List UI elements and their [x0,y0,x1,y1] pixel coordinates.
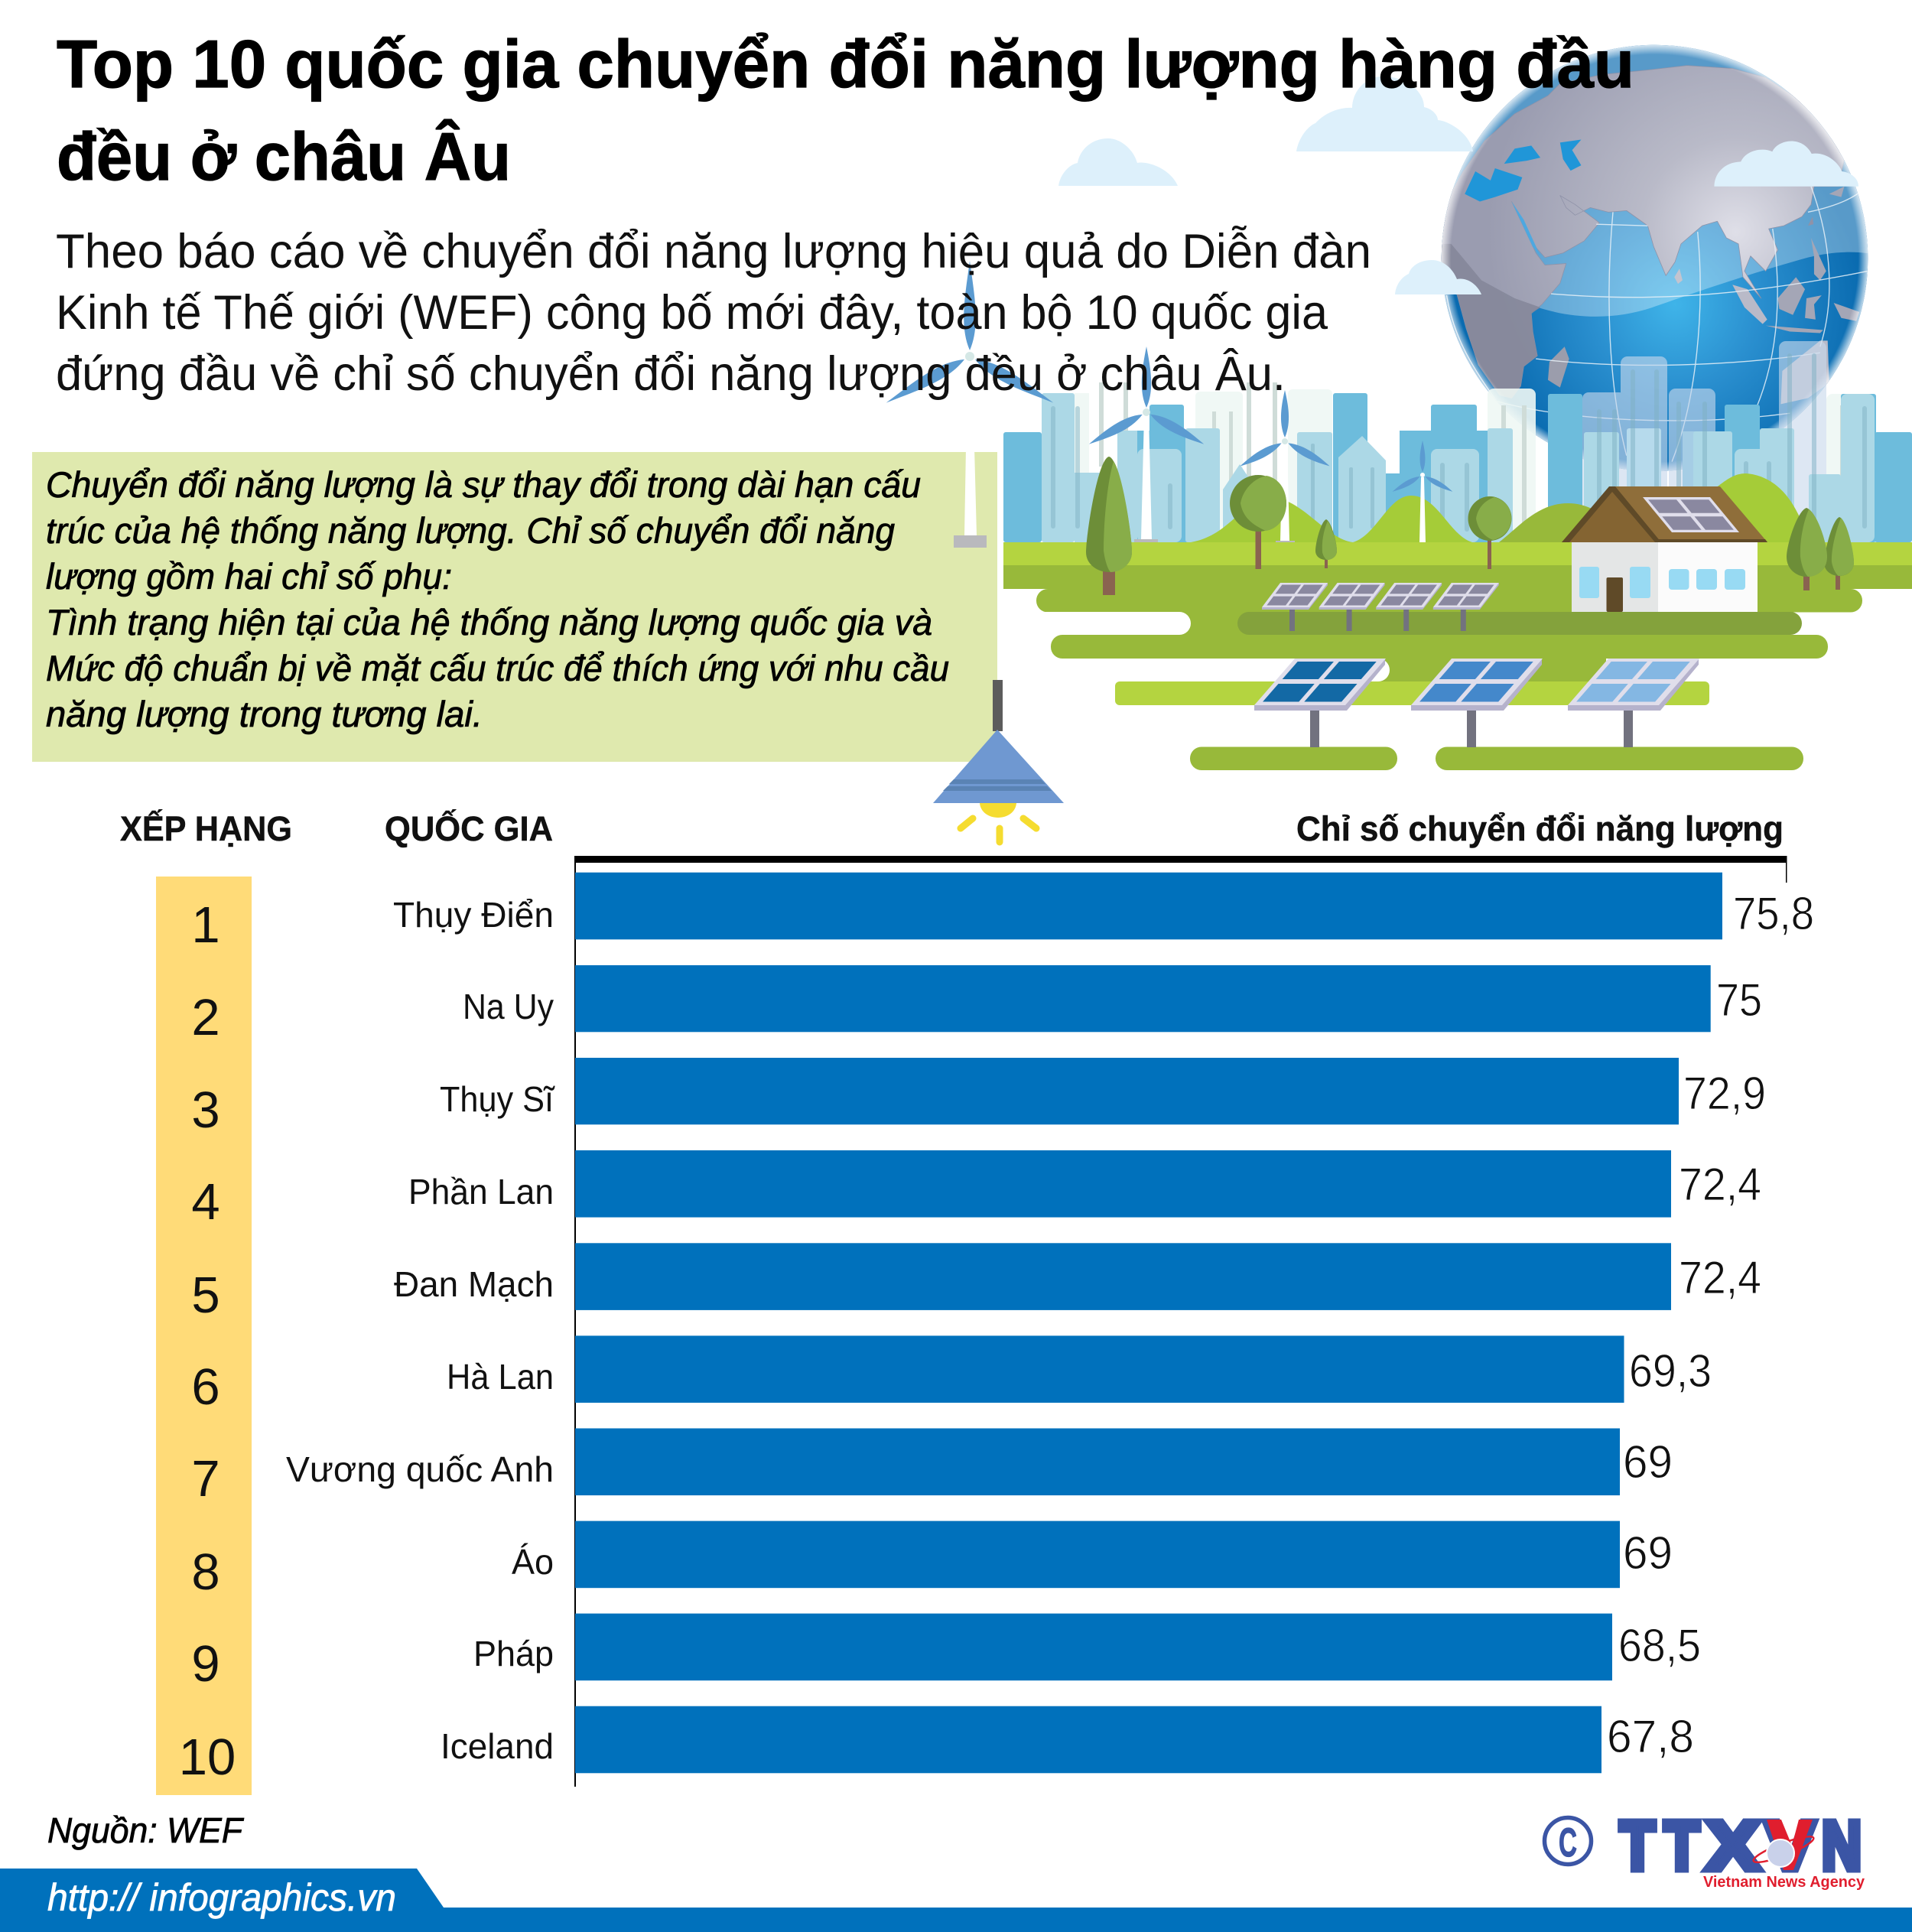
row: Phần Lan 72,4: 72,4 [1679,1159,1761,1210]
row: Áo 69 [512,1521,1673,1588]
wordmark: X [1706,1808,1760,1885]
row: Thụy Sĩ 72,9: Thụy Sĩ [440,1079,555,1119]
illustration: cloud [1395,260,1481,294]
row: Vương quốc Anh 69 [286,1429,1673,1495]
illustration: small tree [1315,519,1337,568]
row: Áo 69: Áo [512,1542,554,1582]
illustration: small solar panel [1319,583,1385,631]
row: Đan Mạch 72,4 [394,1243,1761,1310]
row: Phần Lan 72,4: Phần Lan [408,1172,554,1212]
intro paragraph: Theo báo cáo về chuyển đổi năng lượng hiệu quả do Diễn đàn [56,225,1371,278]
illustration: small solar panel [1376,583,1442,631]
illustration: green hills [1191,473,1810,542]
intro paragraph [56,225,1371,401]
column header: rank: XẾP HẠNG [120,809,292,848]
illustration: globe [1433,38,1884,473]
rank column: 3 [191,1081,220,1139]
illustration: cloud [1058,138,1178,186]
row: Vương quốc Anh 69: Vương quốc Anh [286,1449,554,1489]
rank column: 7 [191,1450,220,1508]
title: đều ở châu Âu [57,119,511,194]
column header: index: Chỉ số chuyển đổi năng lượng [1296,809,1784,848]
row: Áo 69: 69 [1623,1527,1673,1579]
icon: copyright mark: C [1559,1820,1577,1865]
wordmark: T [1620,1808,1655,1885]
row: Hà Lan 69,3 [447,1335,1712,1403]
illustration: cloud [1296,76,1473,151]
footer band [0,1869,1912,1932]
row: Pháp 68,5: 68,5 [1618,1620,1701,1671]
intro paragraph: Kinh tế Thế giới (WEF) công bố mới đây, toàn bộ 10 quốc gia [56,286,1328,340]
rank column: 9 [191,1635,220,1693]
row: Thụy Sĩ 72,9: 72,9 [1683,1068,1766,1119]
title: Top 10 quốc gia chuyển đổi năng lượng hàng đầu [57,26,1634,102]
illustration: light-blue solar panel [1568,659,1699,747]
row: Na Uy 75 [463,965,1762,1032]
illustration: city skyline [1003,341,1912,542]
row: Na Uy 75: Na Uy [463,987,554,1026]
axis frame [574,856,1787,1787]
column header: country: QUỐC GIA [385,809,553,848]
definition text: trúc của hệ thống năng lượng. Chỉ số chuyển đổi năng [46,510,895,551]
row: Pháp 68,5: Pháp [473,1634,554,1673]
row: Thụy Điển 75,8: Thụy Điển [393,895,554,935]
definition text: Chuyển đổi năng lượng là sự thay đổi trong dài hạn cấu [46,464,921,505]
illustration: tall tree [1086,457,1132,595]
rank column: 10 [179,1729,236,1786]
row: Phần Lan 72,4 [408,1150,1761,1218]
illustration: house [1562,486,1767,612]
row: Thụy Điển 75,8 [393,873,1814,939]
definition text: năng lượng trong tương lai. [46,694,483,734]
row: Iceland 67,8: Iceland [441,1726,554,1766]
bar chart [120,809,1814,1795]
illustration: round tree [1230,475,1286,569]
tagline: Vietnam News Agency [1703,1874,1865,1891]
definition text: Tình trạng hiện tại của hệ thống năng lượng quốc gia và [46,602,932,642]
rank column: 5 [191,1267,220,1324]
wordmark: V [1765,1808,1815,1885]
wordmark: N [1822,1808,1862,1885]
rank column: 6 [191,1358,220,1416]
row: Đan Mạch 72,4: 72,4 [1679,1252,1761,1303]
illustration: small solar panel [1433,583,1499,631]
definition text [46,464,949,734]
illustration: small solar panel [1262,583,1328,631]
definition text: lượng gồm hai chỉ số phụ: [46,556,452,597]
illustration: wind turbine [1391,441,1454,548]
illustration: ground bands [1003,542,1912,770]
intro paragraph: đứng đầu về chỉ số chuyển đổi năng lượng đều ở châu Âu. [56,347,1286,401]
row: Thụy Điển 75,8: 75,8 [1733,888,1814,939]
rank column: 2 [191,989,220,1046]
illustration: pair of trees [1787,508,1854,590]
illustration: wind turbine [1238,390,1332,548]
illustration: round tree [1468,496,1511,569]
rank column: 4 [191,1173,220,1231]
illustration: large wind turbine [883,261,1056,548]
row: Hà Lan 69,3: Hà Lan [447,1357,554,1397]
definition text: Mức độ chuẩn bị về mặt cấu trúc để thích ứng với nhu cầu [46,648,949,688]
row: Iceland 67,8: 67,8 [1607,1711,1694,1762]
wordmark: T [1664,1808,1699,1885]
row: Hà Lan 69,3: 69,3 [1629,1345,1712,1397]
illustration: mid-blue solar panel [1411,659,1543,747]
row: Đan Mạch 72,4: Đan Mạch [394,1264,554,1304]
cloud on globe [1714,141,1858,187]
panel: definition box [32,452,997,762]
source note: Nguồn: WEF [47,1810,245,1850]
title [57,26,1634,194]
icon: hanging lamp [933,680,1064,842]
rank column: 8 [191,1543,220,1601]
rank column [156,877,252,1795]
row: Na Uy 75: 75 [1716,974,1762,1026]
illustration: dark-blue solar panel [1254,659,1386,747]
logo: TTXVN [1545,1808,1865,1891]
rank column: 1 [191,896,220,954]
wordmark [1620,1808,1862,1885]
row: Iceland 67,8 [441,1706,1694,1773]
row: Thụy Sĩ 72,9 [440,1058,1766,1124]
footer url: http:// infographics.vn [47,1876,396,1919]
row: Vương quốc Anh 69: 69 [1623,1436,1673,1488]
icon: copyright mark [1545,1817,1591,1865]
illustration: wind turbine [1087,346,1206,548]
emblem: red V and globe [1751,1820,1816,1870]
row: Pháp 68,5 [473,1614,1701,1680]
